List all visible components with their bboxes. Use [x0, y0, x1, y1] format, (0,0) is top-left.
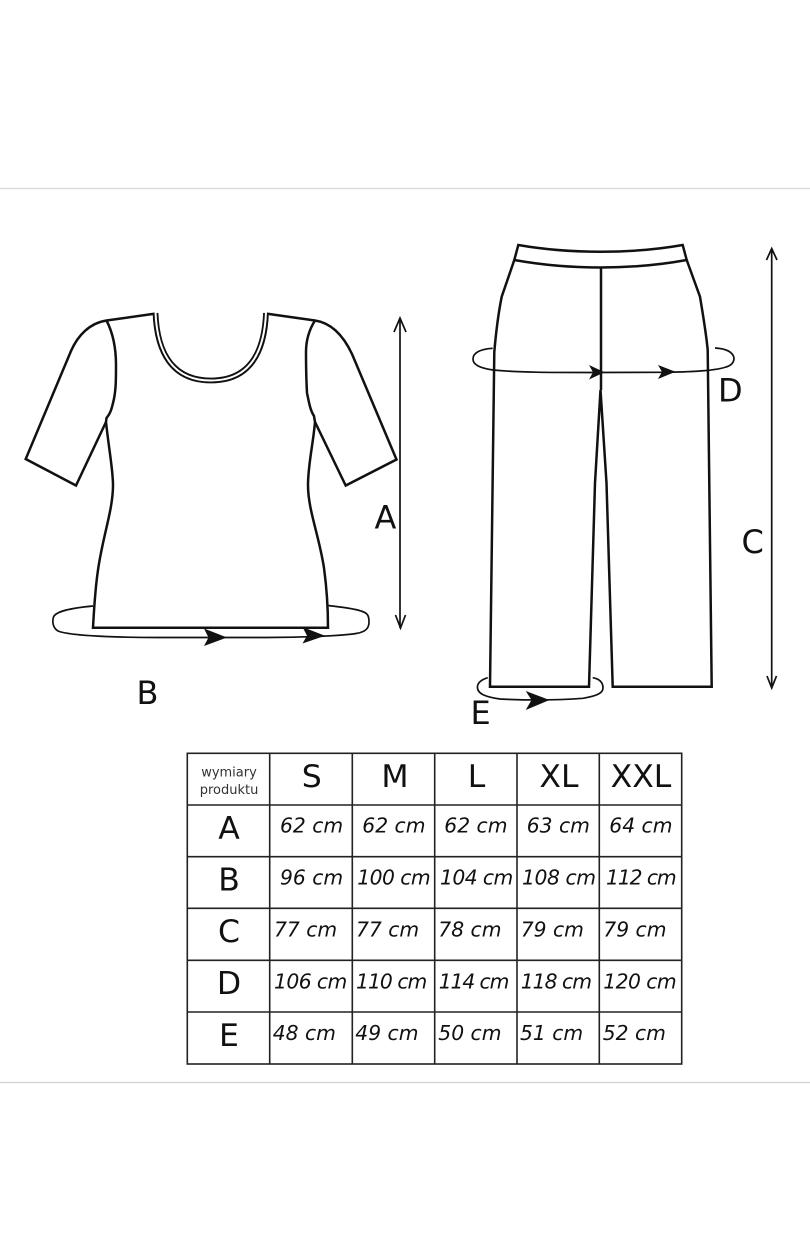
size table: [187, 753, 682, 1064]
table header: [200, 759, 672, 798]
neckline: [156, 312, 266, 380]
row A: 62 cm: [362, 814, 425, 838]
row A: A: [218, 811, 240, 847]
row E: 48 cm: [273, 1021, 336, 1045]
row A: [218, 811, 672, 847]
row D: 106 cm: [274, 969, 347, 993]
row B: [218, 863, 677, 899]
measurement loop E: [477, 678, 603, 710]
row D: [217, 966, 677, 1002]
row A: 64 cm: [609, 814, 672, 838]
table header: produktu: [200, 783, 258, 798]
row E: 50 cm: [438, 1021, 501, 1045]
measurement loop D: [473, 348, 734, 380]
row D: 114 cm: [439, 969, 509, 993]
row E: E: [219, 1018, 239, 1054]
row C: C: [218, 914, 240, 950]
label D: D: [718, 372, 743, 410]
row B: 96 cm: [280, 865, 343, 889]
row E: 49 cm: [355, 1021, 418, 1045]
label E: E: [470, 694, 491, 732]
row C: 78 cm: [438, 918, 501, 942]
row B: 108 cm: [522, 865, 596, 889]
row E: 51 cm: [520, 1021, 583, 1045]
label A: A: [374, 498, 396, 536]
trousers outline: [490, 245, 712, 687]
table header: L: [468, 759, 486, 795]
row A: 63 cm: [527, 814, 590, 838]
trousers diagram: [470, 245, 777, 732]
row D: 110 cm: [356, 969, 427, 993]
row C: 77 cm: [356, 918, 419, 942]
table header: XL: [539, 759, 579, 795]
row D: D: [217, 966, 241, 1002]
arrow A: [394, 318, 406, 628]
arrow C: [766, 248, 777, 688]
label B: B: [136, 674, 158, 712]
row A: 62 cm: [444, 814, 507, 838]
table header: wymiary: [201, 766, 257, 780]
label C: C: [742, 523, 764, 561]
row B: B: [218, 863, 240, 899]
table header: M: [381, 759, 409, 795]
row A: 62 cm: [280, 814, 343, 838]
row E: [219, 1018, 666, 1054]
row C: [218, 914, 666, 950]
row B: 100 cm: [357, 865, 431, 889]
table header: XXL: [611, 759, 672, 795]
table header: S: [302, 759, 322, 795]
row E: 52 cm: [603, 1021, 666, 1045]
table grid: [187, 753, 682, 1064]
shirt outline: [26, 314, 396, 628]
shirt diagram: [26, 312, 406, 712]
row C: 79 cm: [603, 918, 666, 942]
measurement loop B: [53, 606, 369, 646]
row D: 118 cm: [521, 969, 592, 993]
row C: 79 cm: [521, 918, 584, 942]
row C: 77 cm: [274, 918, 337, 942]
row B: 112 cm: [606, 865, 677, 889]
row B: 104 cm: [440, 865, 513, 889]
row D: 120 cm: [603, 969, 677, 993]
